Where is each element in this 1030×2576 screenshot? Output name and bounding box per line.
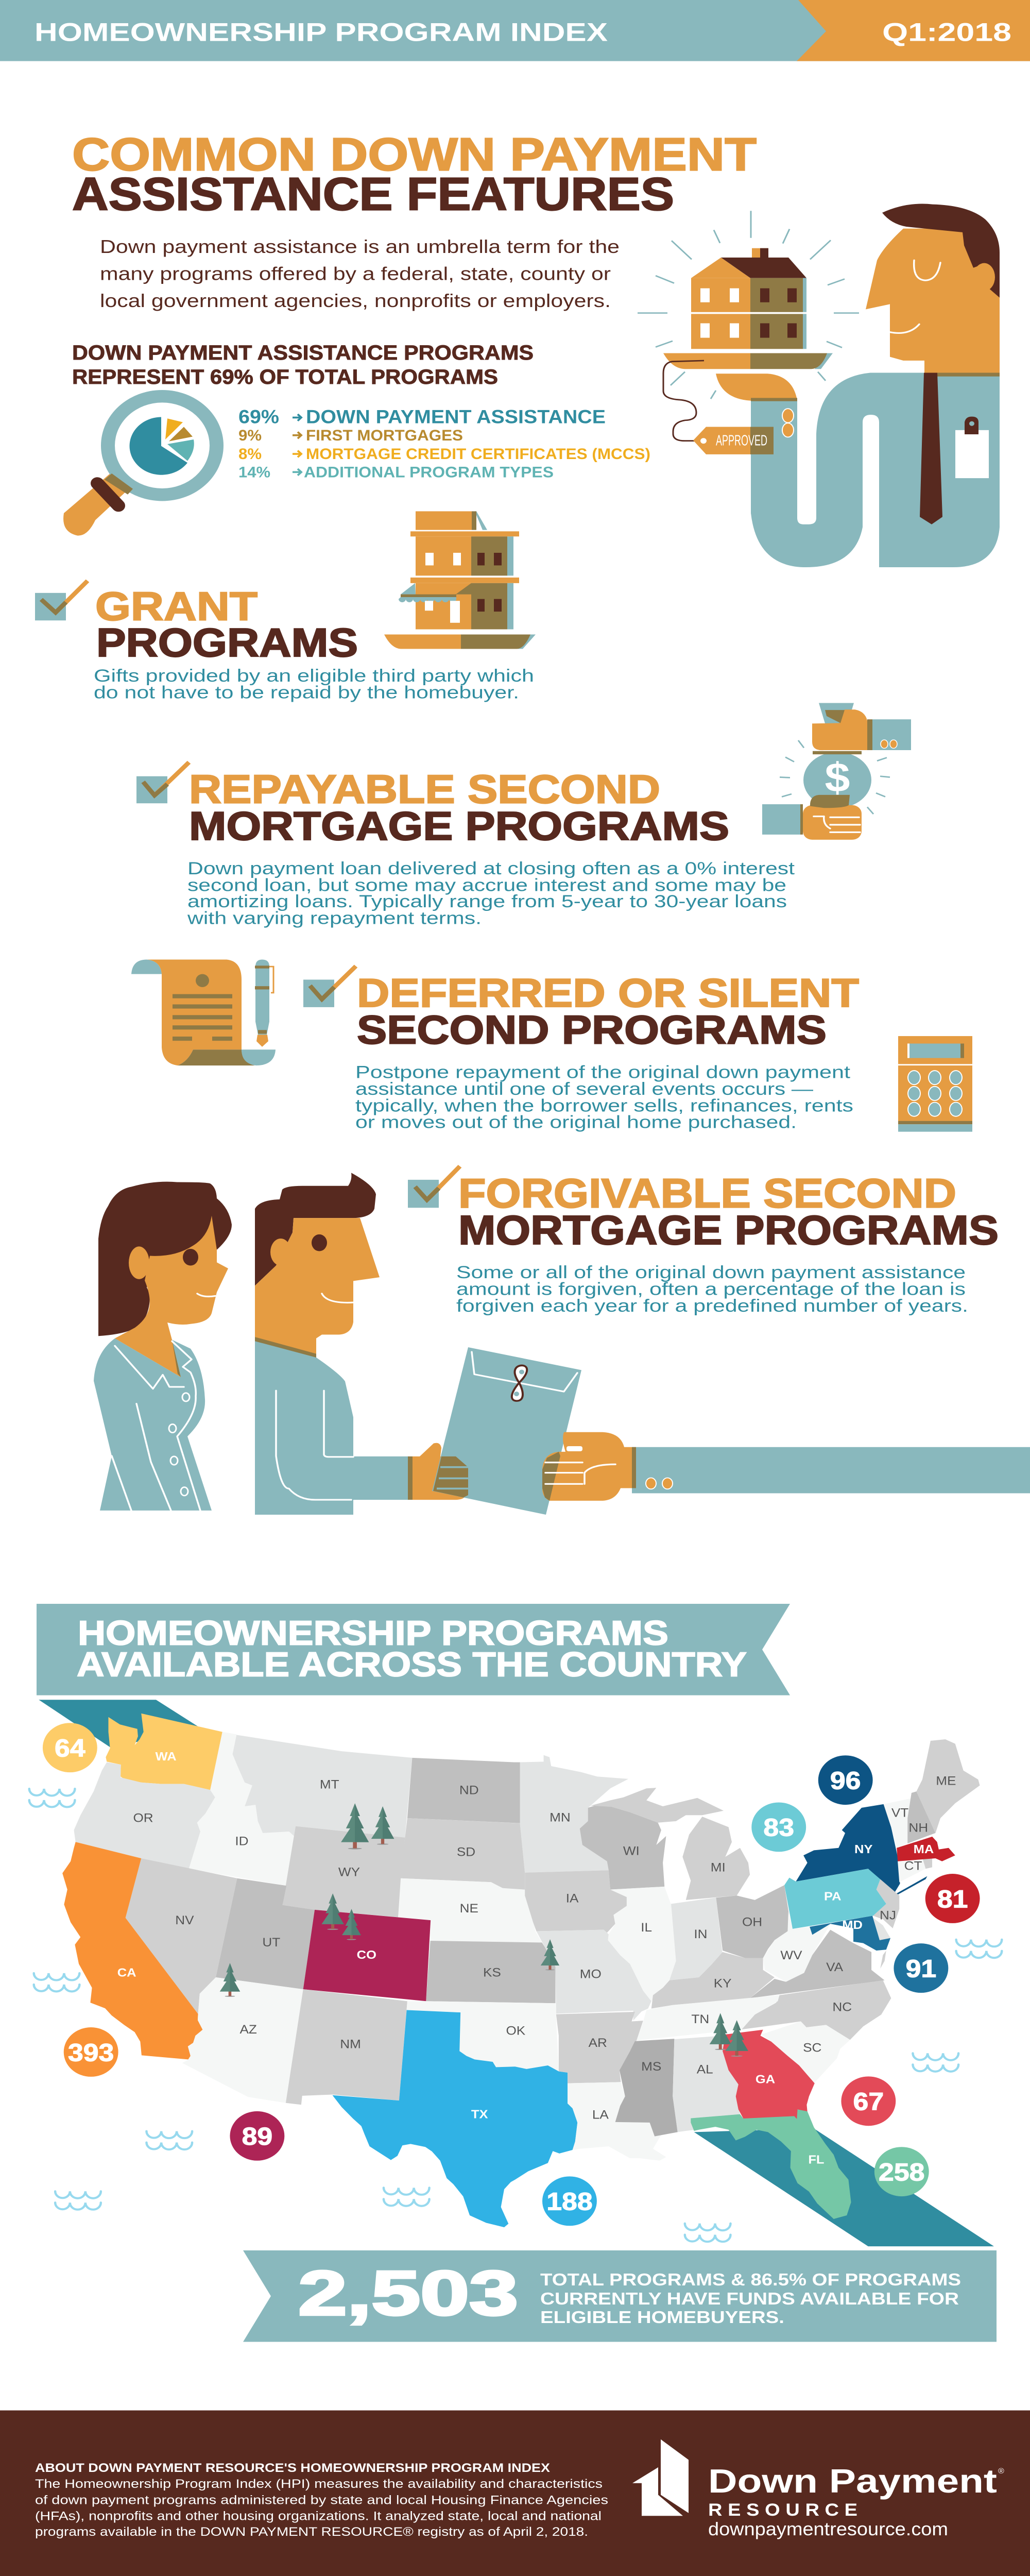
logo text: downpaymentresource.com [708,2519,948,2540]
logo text: RESOURCE [708,2500,857,2520]
subheading: REPRESENT 69% OF TOTAL PROGRAMS [72,365,498,388]
program counts by state: 393 [68,2039,114,2066]
state labels: OR [133,1811,153,1825]
icon: fountain pen [255,960,273,1047]
highlighted state labels [117,1750,934,2166]
main title [72,129,757,220]
section: deferred or silent second programs [303,966,859,1132]
footer [0,2411,1030,2576]
heading: DEFERRED OR SILENT [357,971,859,1015]
program counts by state [43,1723,980,2226]
legend [238,406,650,481]
section: forgivable second mortgage programs [408,1166,999,1316]
description: Down payment loan delivered at closing often as a 0% interest [187,858,795,878]
map banner title: HOMEOWNERSHIP PROGRAMS [78,1614,668,1652]
legend: 8% [238,445,262,463]
description: Gifts provided by an eligible third party which [94,666,534,685]
program counts by state: 91 [906,1955,936,1982]
program counts by state: 83 [763,1814,794,1841]
total description: ELIGIBLE HOMEBUYERS. [540,2308,784,2327]
state labels: MO [580,1968,602,1981]
highlighted state labels: NY [854,1843,872,1856]
description: typically, when the borrower sells, refinances, rents [355,1095,853,1115]
description [187,858,795,928]
header quarter: Q1:2018 [882,19,1011,47]
legend: 9% [238,427,262,444]
state labels: AR [589,2036,607,2050]
logo text: Down Payment [708,2462,997,2500]
program counts by state: 81 [937,1885,968,1913]
approved tag: APPROVED [716,432,767,449]
state labels: OH [742,1916,762,1929]
legend: FIRST MORTGAGES [306,427,463,444]
southern states [556,2012,851,2219]
header bar [0,0,1030,61]
subheading: DOWN PAYMENT ASSISTANCE PROGRAMS [72,341,534,364]
program counts by state: 96 [830,1767,861,1794]
state labels: MT [320,1777,339,1791]
state labels: IA [566,1892,579,1905]
state labels: WI [623,1844,640,1858]
hand under tray [716,374,797,401]
tray [663,353,833,369]
about text: (HFAs), nonprofits and other housing organizations. It analyzed state, local and national [35,2509,602,2523]
section: repayable second mortgage programs [136,762,795,928]
house [691,248,806,349]
legend: 14% [238,464,270,481]
map banner title: AVAILABLE ACROSS THE COUNTRY [77,1645,747,1684]
legend: MORTGAGE CREDIT CERTIFICATES (MCCS) [306,445,650,463]
highlighted state labels: MA [914,1843,934,1856]
state labels: NM [340,2038,361,2051]
envelope string [512,1365,527,1401]
state labels: WV [780,1948,802,1962]
heading: MORTGAGE PROGRAMS [189,804,729,849]
program counts by state: 188 [546,2188,593,2215]
state labels: IL [641,1921,652,1935]
highlighted state labels: MD [842,1919,863,1932]
state labels: LA [592,2108,609,2122]
heading [189,767,729,849]
body and arms [751,372,1000,567]
man's jacket [255,1341,408,1515]
section: grant programs [35,581,534,702]
state labels: SD [457,1845,475,1859]
highlighted state labels: WA [156,1750,177,1764]
intro paragraph: local government agencies, nonprofits or employers. [100,291,611,311]
state labels: KY [714,1977,732,1990]
logo text [708,2462,1004,2540]
heading: GRANT [95,584,258,629]
main title: COMMON DOWN PAYMENT [72,129,757,180]
state labels: NE [460,1902,478,1916]
about text [35,2461,608,2539]
price tag string [663,361,706,441]
highlighted state labels: GA [756,2073,775,2086]
description: assistance until one of several events occurs — [355,1079,814,1099]
state labels: MN [550,1811,571,1824]
program counts by state: 258 [879,2158,924,2186]
state labels: WY [338,1866,360,1879]
state labels: ME [936,1774,956,1788]
icon: checkbox [303,966,356,1007]
face [866,229,1000,373]
state labels: VA [826,1960,843,1974]
total number: 2,503 [298,2258,518,2329]
state labels: AZ [239,2023,257,2037]
approved tag [693,427,774,454]
total description: TOTAL PROGRAMS & 86.5% OF PROGRAMS [540,2270,961,2289]
description: Postpone repayment of the original down payment [355,1062,850,1082]
description: do not have to be repaid by the homebuyer. [94,682,519,702]
heading: REPAYABLE SECOND [189,767,660,811]
awning [399,583,456,602]
legend: 69% [238,406,279,428]
description: amount is forgiven, often a percentage of the loan is [456,1279,966,1299]
state labels: CT [904,1859,922,1873]
state labels: MS [641,2060,661,2073]
illustration: man holding house on tray [638,204,1000,567]
about text: ABOUT DOWN PAYMENT RESOURCE'S HOMEOWNERSHIP PROGRAM INDEX [35,2461,550,2475]
total programs banner [243,2250,997,2342]
intro paragraph [100,236,620,311]
state labels: OK [506,2024,526,2038]
state labels: TN [691,2012,709,2026]
state labels: NV [175,1913,194,1927]
program counts by state: 67 [853,2088,884,2115]
illustration: man receiving envelope [255,1173,468,1515]
description: second loan, but some may accrue interest and some may be [187,875,786,895]
highlighted state labels: CO [357,1948,376,1962]
legend: ADDITIONAL PROGRAM TYPES [304,464,554,481]
heading: FORGIVABLE SECOND [458,1170,956,1216]
icon: checkbox [408,1166,460,1208]
state labels: IN [694,1927,707,1941]
state labels: AL [697,2063,713,2076]
state labels: ND [459,1783,479,1797]
pie chart [130,417,194,475]
heading [357,971,859,1053]
state labels: SC [803,2041,821,2055]
state labels: KS [483,1965,501,1979]
eye and smile [914,260,940,280]
icon: checkbox [35,581,88,620]
about text: The Homeownership Program Index (HPI) measures the availability and characteristics [35,2477,603,2491]
illustration: woman [94,1182,232,1511]
intro paragraph: Down payment assistance is an umbrella term for the [100,236,620,257]
dollar sign: $ [825,754,850,801]
woman's jacket [94,1338,212,1511]
heading: SECOND PROGRAMS [357,1008,827,1053]
illustration: two-storey house on tray [384,511,536,649]
rays [638,211,859,399]
header title: HOMEOWNERSHIP PROGRAM INDEX [35,19,608,47]
total description [540,2270,961,2327]
state labels: UT [262,1936,280,1950]
highlighted state labels: TX [471,2108,488,2121]
highlighted state labels: PA [824,1890,842,1903]
map banner [37,1604,790,1695]
state labels: ID [235,1835,248,1848]
description: with varying repayment terms. [187,908,482,928]
state labels [133,1774,956,2122]
program counts by state: 64 [55,1734,85,1762]
state labels: VT [891,1806,908,1820]
subheading [72,341,534,388]
state labels: NC [832,2000,852,2014]
collar and tie [937,372,1000,377]
water bands [39,1700,994,2246]
right hand [542,1432,673,1501]
logo text: ® [998,2467,1004,2476]
intro paragraph: many programs offered by a federal, state, county or [100,263,611,284]
map banner title [77,1614,747,1684]
highlighted state labels: FL [808,2154,825,2166]
about text: programs available in the DOWN PAYMENT RESOURCE® registry as of April 2, 2018. [35,2525,588,2539]
heading: MORTGAGE PROGRAMS [458,1207,999,1253]
central and eastern states [520,1739,980,2040]
description [355,1062,853,1132]
western states [62,1714,577,2227]
description [94,666,534,702]
logo mark [632,2439,689,2516]
state labels: MI [711,1861,726,1874]
legend: DOWN PAYMENT ASSISTANCE [306,406,606,428]
icon: hands passing money bag [762,703,911,840]
description [456,1262,968,1316]
total description: CURRENTLY HAVE FUNDS AVAILABLE FOR [540,2290,959,2309]
illustration: envelope and hand [432,1347,1030,1515]
heading [95,584,358,665]
description: or moves out of the original home purchased. [355,1112,797,1132]
description: amortizing loans. Typically range from 5-year to 30-year loans [187,891,787,911]
state labels: NH [908,1821,928,1835]
main title: ASSISTANCE FEATURES [72,169,674,220]
state labels: NJ [880,1909,896,1922]
badge [955,417,989,478]
icon: magnifier with pie chart [63,390,224,536]
map of the United States [29,1700,1002,2246]
about text: of down payment programs administered by state and local Housing Finance Agencies [35,2494,608,2507]
waves [29,1789,1002,2242]
heading [458,1170,999,1253]
highlighted state labels: CA [117,1966,136,1979]
hair [882,204,1000,298]
description: forgiven each year for a predefined number of years. [456,1296,968,1316]
description: Some or all of the original down payment assistance [456,1262,966,1282]
icon: calculator [898,1036,972,1132]
icon: scroll document [131,960,276,1065]
heading: PROGRAMS [96,621,358,665]
trees [220,1803,748,2057]
program counts by state: 89 [242,2122,272,2150]
icon: checkbox [136,762,189,803]
